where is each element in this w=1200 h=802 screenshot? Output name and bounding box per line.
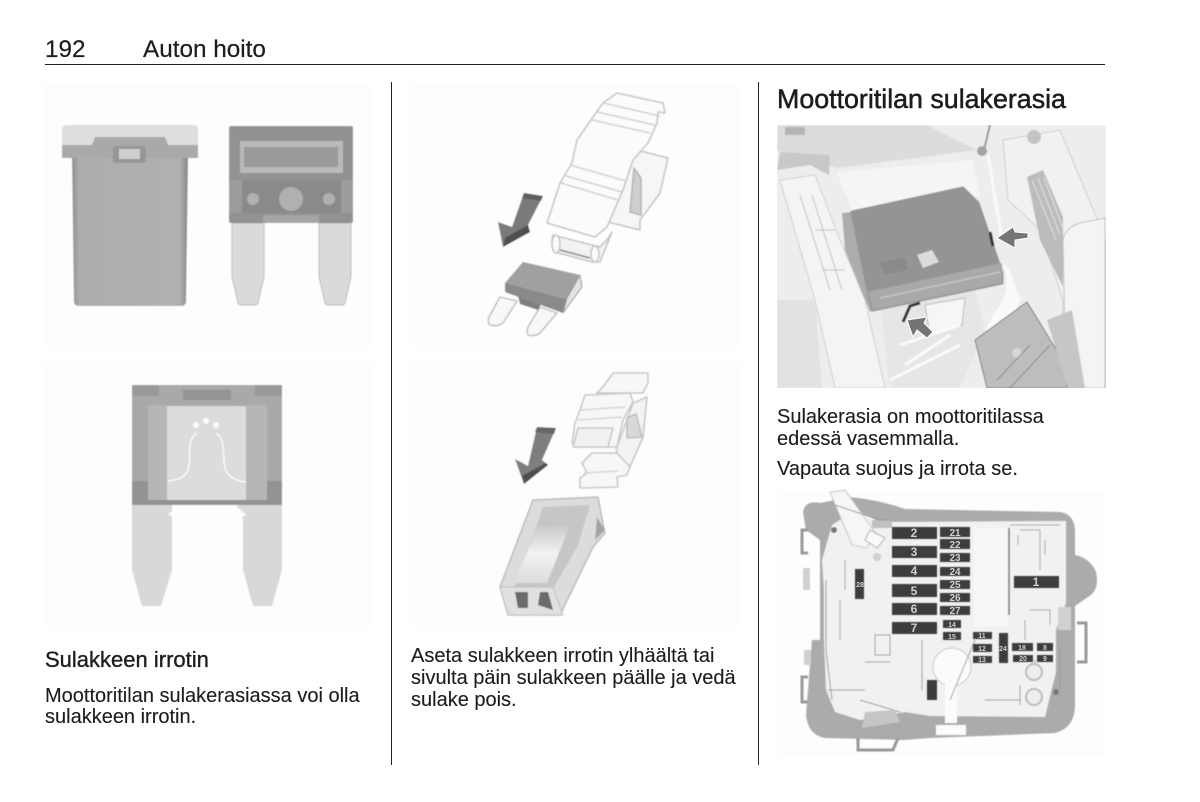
panel: fuse front and side view bbox=[43, 84, 372, 347]
column divider left bbox=[391, 82, 392, 765]
fuse numbers bbox=[856, 526, 1047, 664]
fuse numbers: 4 bbox=[911, 564, 918, 578]
fuse numbers: 15 bbox=[948, 634, 956, 641]
fuse numbers: 28 bbox=[856, 582, 864, 589]
fuse numbers: 24 bbox=[999, 646, 1007, 653]
arrow: lower release clip bbox=[907, 317, 933, 338]
fuse numbers: 22 bbox=[949, 540, 961, 551]
fuse slots bbox=[855, 527, 1059, 700]
text block: fuse box location: edessä vasemmalla. bbox=[777, 428, 959, 450]
fuse numbers: 26 bbox=[949, 593, 961, 604]
icon: fuse front view bbox=[229, 126, 353, 305]
fuse numbers: 12 bbox=[978, 646, 986, 653]
page header: Auton hoito bbox=[143, 36, 266, 63]
text block: instructions bbox=[411, 645, 737, 711]
fuse numbers: 13 bbox=[978, 657, 986, 664]
fuse numbers: 9 bbox=[1043, 656, 1047, 663]
icon: fuse puller bbox=[547, 93, 668, 262]
page header bbox=[45, 36, 1105, 65]
fuse numbers: 20 bbox=[1019, 656, 1027, 663]
heading: Sulakkeen irrotin: Sulakkeen irrotin bbox=[45, 647, 209, 672]
text block: fuse puller location: Moottoritilan sulakerasiassa voi olla bbox=[45, 685, 360, 707]
fuse numbers: 6 bbox=[911, 602, 918, 616]
fuse numbers: 1 bbox=[1033, 575, 1040, 589]
illustration: engine bay with fuse box cover bbox=[777, 125, 1106, 388]
icon: blown fuse bbox=[132, 385, 282, 606]
icon: fuse body from above bbox=[500, 497, 605, 615]
text block: fuse box location: Vapauta suojus ja irrota se. bbox=[777, 458, 1018, 480]
fuse numbers: 2 bbox=[911, 526, 918, 540]
diagram: fuse box layout bbox=[777, 490, 1106, 755]
arrow: insert direction bbox=[515, 427, 556, 484]
icon: fuse puller side bbox=[572, 373, 648, 488]
icon: mini fuse bbox=[488, 262, 582, 336]
fuse box housing bbox=[802, 490, 1097, 750]
fuse numbers: 11 bbox=[978, 633, 986, 640]
fuse numbers: 24 bbox=[949, 567, 961, 578]
panel: puller on fuse, side bbox=[410, 363, 740, 627]
page header: 192 bbox=[45, 36, 86, 63]
text block: instructions: Aseta sulakkeen irrotin ylhäältä tai bbox=[411, 645, 714, 667]
text block: fuse box location bbox=[777, 406, 1045, 480]
fuse numbers: 14 bbox=[948, 622, 956, 629]
arrow: right release clip bbox=[997, 227, 1028, 248]
fuse numbers: 18 bbox=[1018, 645, 1026, 652]
text block: fuse box location: Sulakerasia on moottoritilassa bbox=[777, 406, 1045, 428]
heading: Moottoritilan sulakerasia: Moottoritilan sulakerasia bbox=[777, 84, 1066, 114]
arrow: pull direction bbox=[498, 193, 543, 247]
fuse numbers: 25 bbox=[949, 580, 961, 591]
fuse numbers: 8 bbox=[1043, 645, 1047, 652]
text block: instructions: sivulta päin sulakkeen päälle ja vedä bbox=[411, 667, 737, 689]
text block: fuse puller location: sulakkeen irrotin. bbox=[45, 706, 196, 728]
panel: blown fuse view bbox=[43, 363, 372, 627]
fuse numbers: 3 bbox=[911, 545, 918, 559]
fuse numbers: 7 bbox=[911, 621, 918, 635]
text block: instructions: sulake pois. bbox=[411, 689, 517, 711]
fuse numbers: 23 bbox=[949, 553, 961, 564]
fuse numbers: 27 bbox=[949, 606, 961, 617]
icon: fuse side view bbox=[62, 125, 198, 306]
column divider right bbox=[758, 82, 759, 765]
fuse numbers: 5 bbox=[911, 584, 918, 598]
panel: puller on fuse, top bbox=[410, 84, 740, 347]
text block: fuse puller location bbox=[45, 685, 360, 728]
fuse numbers: 21 bbox=[949, 528, 961, 539]
